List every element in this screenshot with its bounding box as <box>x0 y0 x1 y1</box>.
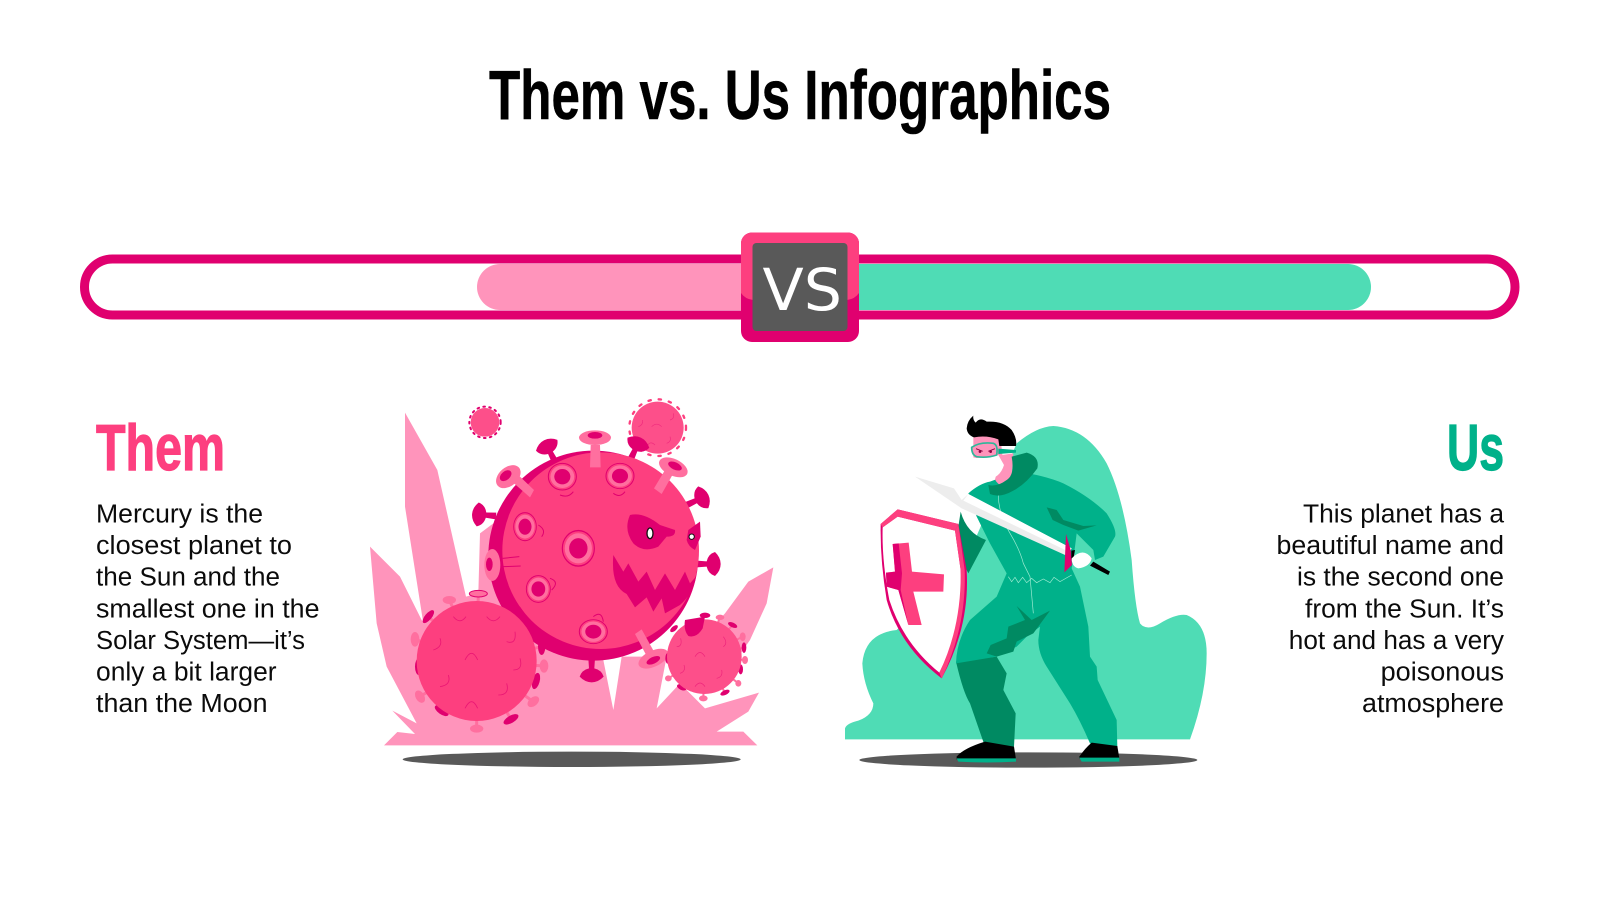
text block: us description: from the Sun. It’s <box>1305 595 1504 623</box>
mouth <box>613 555 696 613</box>
small virus top left <box>469 407 501 438</box>
text block: us description: is the second one <box>1297 564 1504 592</box>
text block: them description: Solar System—it’s <box>96 627 305 655</box>
spike stems <box>668 617 745 698</box>
hair <box>967 416 1016 446</box>
left eye <box>627 514 675 549</box>
suit <box>956 472 1117 747</box>
text block: us description: poisonous <box>1381 658 1504 686</box>
suit seams <box>998 495 1072 613</box>
bar: outline <box>84 259 1515 315</box>
front arm <box>958 512 986 573</box>
spike stems <box>415 594 544 729</box>
small virus top right <box>629 399 686 456</box>
bar: green fill <box>800 264 1371 310</box>
panel: us text <box>1276 411 1505 718</box>
text block: us description: atmosphere <box>1362 690 1504 718</box>
rear leg <box>956 657 1016 747</box>
shadow under hero <box>859 752 1197 768</box>
comparison bar <box>84 232 1515 342</box>
glove <box>1072 552 1092 568</box>
light spikes <box>484 430 691 673</box>
text block: us description: This planet has a <box>1303 500 1505 528</box>
illustration: hero with sword and shield <box>845 416 1207 768</box>
text block: them description: than the Moon <box>96 690 268 718</box>
pink burst background <box>370 413 773 745</box>
shield <box>881 509 967 678</box>
dark spikes <box>471 433 721 682</box>
text block: us description <box>1276 500 1505 718</box>
shield cross <box>886 543 944 625</box>
text block: them description: Mercury is the <box>96 500 263 528</box>
text block: them description: the Sun and the <box>96 564 280 592</box>
collar <box>988 453 1038 496</box>
virus body <box>488 451 698 661</box>
text block: them description: smallest one in the <box>96 595 320 623</box>
large virus bottom left <box>411 590 548 733</box>
goggles <box>972 443 1016 457</box>
illustration: virus characters <box>370 399 773 767</box>
neck <box>995 453 1013 487</box>
body lines <box>503 492 625 622</box>
shadow under virus <box>403 752 741 767</box>
text block: us description: hot and has a very <box>1289 627 1504 655</box>
title: Them vs. Us Infographics <box>489 56 1111 134</box>
heading: them: Them <box>96 411 225 484</box>
panel: them text <box>96 411 320 718</box>
sword <box>915 477 1110 575</box>
vs badge: VS <box>762 256 842 324</box>
body spots <box>514 463 634 644</box>
main virus <box>471 430 721 682</box>
face <box>973 433 1003 463</box>
spikes <box>411 590 548 733</box>
mask <box>973 455 1004 479</box>
hero figure <box>956 416 1119 762</box>
text block: them description <box>96 500 320 718</box>
green blob background <box>845 426 1207 739</box>
heading: us: Us <box>1447 411 1504 484</box>
right eye <box>687 522 701 550</box>
medium virus bottom right <box>665 613 748 701</box>
bar: pink fill <box>477 264 800 310</box>
suit folds <box>987 507 1097 657</box>
text block: us description: beautiful name and <box>1276 532 1504 560</box>
surface arcs <box>433 617 521 708</box>
text block: them description: only a bit larger <box>96 658 277 686</box>
text block: them description: closest planet to <box>96 532 292 560</box>
vs badge <box>741 232 859 342</box>
shoes <box>957 742 1119 762</box>
